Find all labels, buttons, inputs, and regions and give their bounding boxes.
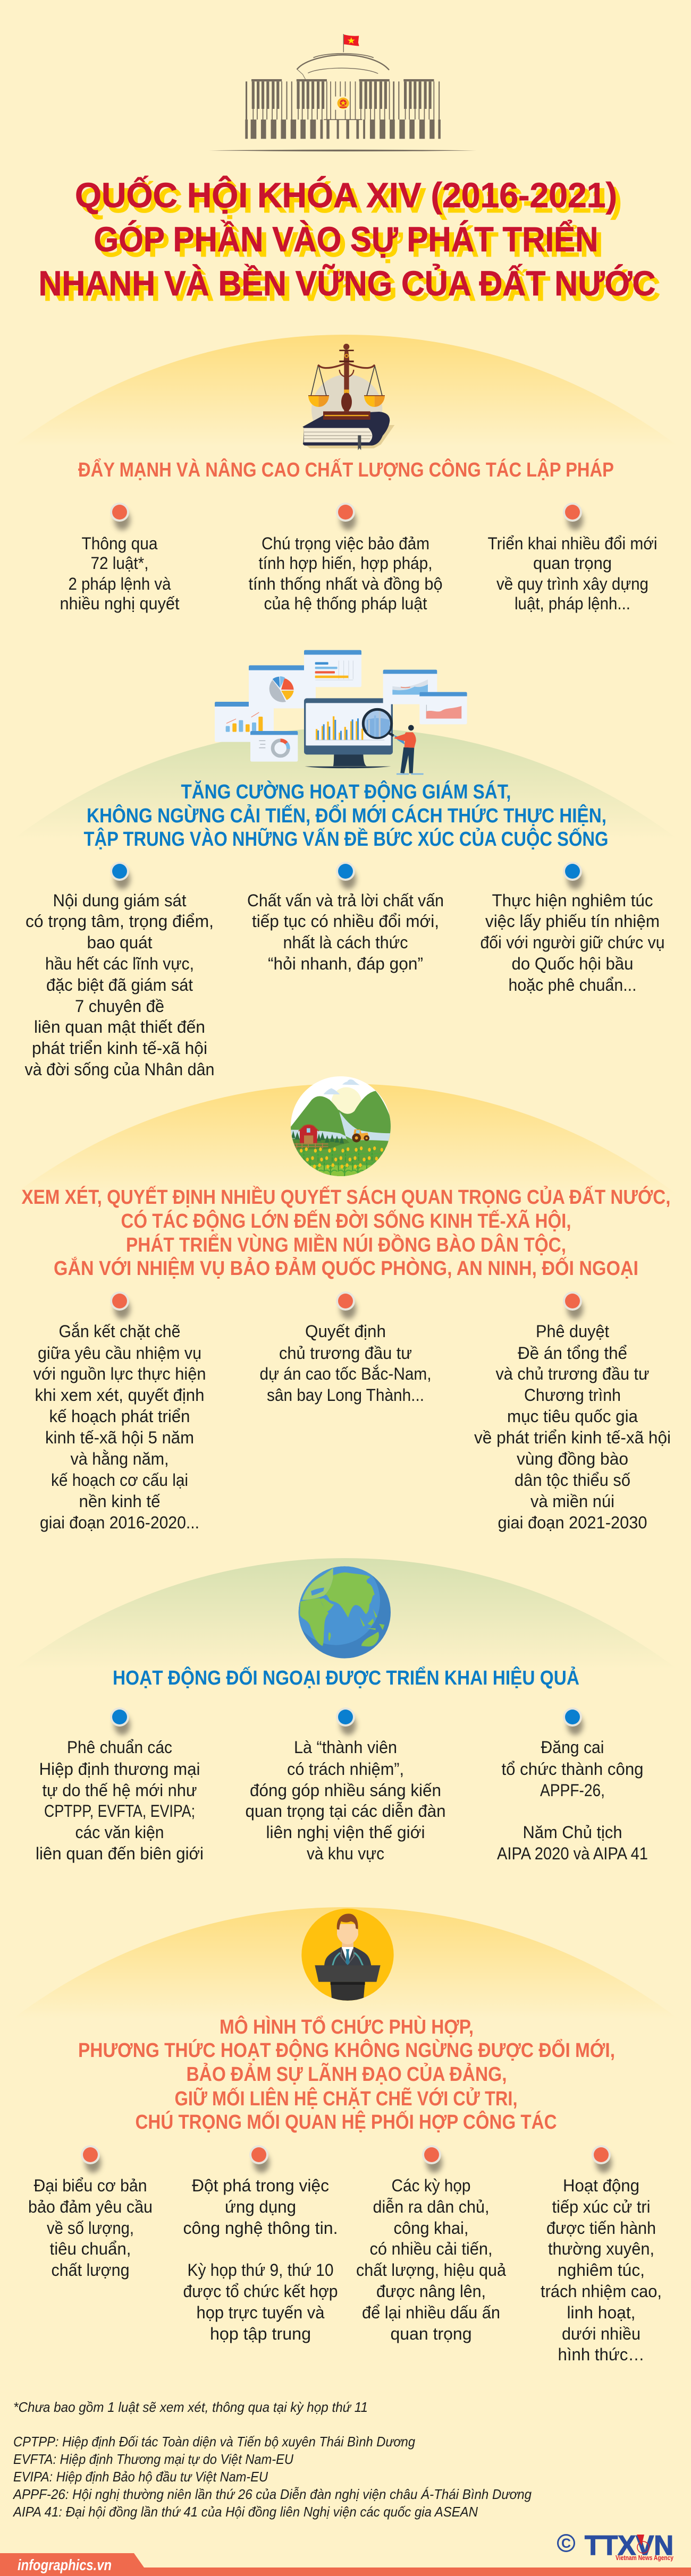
point 2: họp trực tuyến và: [197, 2303, 325, 2322]
point 4: thường xuyên,: [548, 2239, 654, 2258]
icon: globe: [299, 1566, 391, 1659]
logo: TTXVN: C: [561, 2536, 571, 2551]
point 2: nhất là cách thức: [283, 933, 408, 952]
logo: TTXVN: TTXVN: [585, 2530, 673, 2561]
icon: national emblem: [338, 98, 349, 109]
panel: oversight: [13, 650, 678, 1079]
point 2: của hệ thống pháp luật: [264, 594, 427, 613]
panel: organisation model: [13, 1907, 678, 2364]
point 1: nhiều nghị quyết: [60, 594, 180, 613]
heading: [21, 1185, 671, 1280]
heading: PHÁT TRIỂN VÙNG MIỀN NÚI ĐỒNG BÀO DÂN TỘC,: [126, 1232, 566, 1256]
heading: PHƯƠNG THỨC HOẠT ĐỘNG KHÔNG NGỪNG ĐƯỢC ĐỔI MỚI,: [78, 2038, 615, 2062]
point 4: hình thức…: [558, 2345, 644, 2364]
point 2: liên nghị viện thế giới: [266, 1823, 425, 1842]
chart window: bar chart: [215, 702, 274, 742]
point 3: [488, 503, 657, 613]
point 1: CPTPP, EVFTA, EVIPA;: [44, 1801, 195, 1821]
point 3: luật, pháp lệnh...: [515, 594, 630, 613]
title: NHANH VÀ BỀN VỮNG CỦA ĐẤT NƯỚC: [38, 263, 656, 303]
point 2: “hỏi nhanh, đáp gọn”: [268, 954, 423, 973]
icon: dome: [297, 54, 389, 79]
point 1: khi xem xét, quyết định: [35, 1385, 204, 1405]
point 2: tính thống nhất và đồng bộ: [249, 574, 442, 593]
heading: BẢO ĐẢM SỰ LÃNH ĐẠO CỦA ĐẢNG,: [186, 2062, 507, 2086]
title: QUỐC HỘI KHÓA XIV (2016-2021): [75, 175, 617, 215]
point 2: được tổ chức kết hợp: [183, 2282, 338, 2301]
point 3: APPF-26,: [540, 1781, 605, 1800]
corn field: [299, 1146, 386, 1176]
point 3: Đề án tổng thể: [518, 1344, 627, 1363]
heading: KHÔNG NGỪNG CẢI TIẾN, ĐỔI MỚI CÁCH THỨC THỰC HIỆN,: [87, 803, 606, 827]
point 2: tính hợp hiến, hợp pháp,: [258, 554, 433, 573]
heading: CHÚ TRỌNG MỐI QUAN HỆ PHỐI HỢP CÔNG TÁC: [135, 2110, 557, 2133]
footnote: *Chưa bao gồm 1 luật sẽ xem xét, thông qua tại kỳ họp thứ 11: [13, 2399, 368, 2415]
point 1: Nội dung giám sát: [53, 891, 187, 910]
point 3: Năm Chủ tịch: [523, 1823, 622, 1842]
point 1: nền kinh tế: [79, 1492, 161, 1511]
point 3: do Quốc hội bầu: [511, 954, 634, 973]
point 3: [356, 2145, 506, 2343]
point 3: AIPA 2020 và AIPA 41: [497, 1844, 648, 1863]
point 4: [541, 2145, 662, 2364]
point 2: [246, 1707, 445, 1863]
point 1: kinh tế-xã hội 5 năm: [45, 1428, 194, 1447]
point 4: dưới nhiều: [562, 2324, 641, 2343]
point 1: 72 luật*,: [90, 554, 149, 573]
point 3: và chủ trương đầu tư: [495, 1364, 650, 1383]
point 1: kế hoạch phát triển: [49, 1407, 190, 1426]
glossary: EVFTA: Hiệp định Thương mại tự do Việt Nam-EU: [13, 2451, 293, 2467]
point 3: vùng đồng bào: [517, 1449, 628, 1468]
logo: TTXVN: Vietnam News Agency: [616, 2554, 674, 2562]
point 1: tự do thế hệ mới như: [43, 1781, 197, 1800]
point 1: Thông qua: [82, 534, 158, 553]
point 1: về số lượng,: [47, 2218, 134, 2238]
point 3: và miền núi: [530, 1492, 614, 1511]
point 1: và hằng năm,: [70, 1449, 169, 1468]
point 3: Chương trình: [524, 1385, 621, 1405]
point 2: Là “thành viên: [294, 1738, 397, 1757]
point 4: được tiến hành: [546, 2218, 656, 2238]
point 3: quan trọng: [390, 2324, 472, 2343]
background arc: [13, 1907, 678, 2019]
point 3: Triển khai nhiều đổi mới: [488, 534, 657, 553]
point 3: Đăng cai: [541, 1738, 604, 1757]
footer bar: infographics.vn: [18, 2557, 112, 2574]
point 1: Gắn kết chặt chẽ: [58, 1322, 181, 1341]
point 3: được nâng lên,: [376, 2282, 486, 2301]
point 2: Quyết định: [305, 1322, 386, 1341]
glossary: APPF-26: Hội nghị thường niên lần thứ 26 của Diễn đàn nghị viện châu Á-Thái Bình Dương: [12, 2486, 532, 2502]
point 1: [36, 1707, 204, 1863]
point 1: với nguồn lực thực hiện: [33, 1364, 206, 1383]
heading: MÔ HÌNH TỔ CHỨC PHÙ HỢP,: [220, 2014, 474, 2038]
point 3: tổ chức thành công: [502, 1759, 643, 1779]
figure: analyst: [393, 725, 424, 775]
point 3: [474, 1291, 671, 1532]
icon: magnifying glass: [363, 709, 394, 738]
chart window: horizontal bars: [304, 650, 361, 687]
icon: flag: [343, 34, 359, 52]
chart window: area chart red: [419, 692, 467, 724]
point 2: Chú trọng việc bảo đảm: [262, 534, 429, 553]
heading: ĐẨY MẠNH VÀ NÂNG CAO CHẤT LƯỢNG CÔNG TÁC LẬP PHÁP: [78, 457, 614, 481]
point 2: họp tập trung: [210, 2324, 311, 2343]
point 2: công nghệ thông tin.: [183, 2218, 338, 2238]
point 3: về quy trình xây dựng: [496, 574, 648, 593]
point 2: dự án cao tốc Bắc-Nam,: [259, 1364, 432, 1383]
point 1: Hiệp định thương mại: [39, 1759, 200, 1779]
point 4: nghiêm túc,: [558, 2260, 645, 2280]
point 2: ứng dụng: [225, 2197, 296, 2216]
point 3: để lại nhiều dấu ấn: [362, 2303, 500, 2322]
panel: major decisions: [13, 1076, 678, 1532]
point 2: tiếp tục có nhiều đổi mới,: [252, 912, 439, 931]
point 3: chất lượng, hiệu quả: [356, 2260, 506, 2280]
point 3: dân tộc thiểu số: [515, 1470, 630, 1490]
point 3: Phê duyệt: [536, 1322, 609, 1341]
heading: GẮN VỚI NHIỆM VỤ BẢO ĐẢM QUỐC PHÒNG, AN NINH, ĐỐI NGOẠI: [54, 1256, 638, 1280]
point 2: Kỳ họp thứ 9, thứ 10: [187, 2260, 334, 2280]
point 3: đối với người giữ chức vụ: [481, 933, 664, 952]
point 2: chủ trương đầu tư: [279, 1344, 412, 1363]
background arc: [13, 728, 678, 839]
title: GÓP PHẦN VÀO SỰ PHÁT TRIỂN: [94, 219, 599, 259]
footer bar: [0, 2553, 691, 2576]
point 3: hoặc phê chuẩn...: [508, 975, 637, 994]
point 2: Chất vấn và trả lời chất vấn: [247, 891, 444, 910]
icon: monitor: [304, 698, 393, 768]
background arc: [13, 335, 678, 446]
icon: barn: [294, 1125, 328, 1149]
icon: farm landscape: [287, 1076, 393, 1179]
point 3: Thực hiện nghiêm túc: [492, 891, 653, 910]
glossary: EVIPA: Hiệp định Bảo hộ đầu tư Việt Nam-EU: [13, 2469, 268, 2485]
point 2: quan trọng tại các diễn đàn: [246, 1801, 445, 1821]
chart window: donut chart: [250, 731, 298, 762]
point 3: có nhiều cải tiến,: [370, 2239, 492, 2258]
point 1: giữa yêu cầu nhiệm vụ: [38, 1344, 201, 1363]
panel: legislation: [13, 335, 678, 613]
point 1: hầu hết các lĩnh vực,: [45, 954, 194, 973]
chart window: area chart blue: [383, 670, 437, 704]
point 3: diễn ra dân chủ,: [373, 2197, 489, 2216]
heading: GIỮ MỐI LIÊN HỆ CHẶT CHẼ VỚI CỬ TRI,: [174, 2086, 518, 2110]
point 4: trách nhiệm cao,: [541, 2282, 662, 2301]
point 2: sân bay Long Thành...: [267, 1385, 424, 1405]
point 1: và đời sống của Nhân dân: [24, 1060, 215, 1079]
heading: HOẠT ĐỘNG ĐỐI NGOẠI ĐƯỢC TRIỂN KHAI HIỆU QUẢ: [113, 1665, 579, 1689]
point 1: đặc biệt đã giám sát: [46, 975, 193, 994]
point 1: 7 chuyên đề: [75, 997, 164, 1016]
point 2: Đột phá trong việc: [192, 2176, 329, 2195]
point 3: [497, 1707, 648, 1863]
point 1: [33, 1291, 206, 1532]
point 1: Đại biểu cơ bản: [34, 2176, 147, 2195]
heading: TẬP TRUNG VÀO NHỮNG VẤN ĐỀ BỨC XÚC CỦA CUỘC SỐNG: [84, 827, 608, 851]
point 1: liên quan đến biên giới: [36, 1844, 204, 1863]
background arc: [13, 1084, 678, 1195]
point 1: 2 pháp lệnh và: [68, 574, 171, 593]
point 3: giai đoạn 2021-2030: [498, 1513, 647, 1532]
point 1: giai đoạn 2016-2020...: [40, 1513, 199, 1532]
point 1: các văn kiện: [75, 1823, 164, 1842]
point 2: [183, 2145, 338, 2343]
point 4: linh hoạt,: [567, 2303, 636, 2322]
point 1: [60, 503, 180, 613]
point 1: Phê chuẩn các: [67, 1738, 172, 1757]
icon: scales of justice on a book: [302, 344, 394, 450]
point 2: và khu vực: [307, 1844, 384, 1863]
point 3: việc lấy phiếu tín nhiệm: [485, 912, 660, 931]
heading: CÓ TÁC ĐỘNG LỚN ĐẾN ĐỜI SỐNG KINH TẾ-XÃ HỘI,: [121, 1209, 571, 1232]
point 1: [28, 2145, 153, 2280]
icon: tractor: [352, 1129, 369, 1142]
point 3: mục tiêu quốc gia: [507, 1407, 638, 1426]
background arc: [13, 1558, 678, 1670]
point 2: đóng góp nhiều sáng kiến: [250, 1781, 441, 1800]
title: [38, 175, 656, 303]
point 3: [481, 862, 664, 994]
glossary: AIPA 41: Đại hội đồng lần thứ 41 của Hội đồng liên Nghị viện các quốc gia ASEAN: [12, 2504, 478, 2520]
point 2: có trách nhiệm”,: [287, 1759, 404, 1779]
point 1: bảo đảm yêu cầu: [28, 2197, 153, 2216]
heading: [78, 2014, 615, 2133]
glossary: CPTPP: Hiệp định Đối tác Toàn diện và Tiến bộ xuyên Thái Bình Dương: [13, 2434, 415, 2450]
icon: National Assembly building: [209, 34, 477, 151]
point 4: Hoạt động: [563, 2176, 639, 2195]
point 3: quan trọng: [533, 554, 612, 573]
point 1: [24, 862, 215, 1079]
panel: foreign relations: [13, 1557, 678, 1863]
point 3: Các kỳ họp: [391, 2176, 471, 2195]
glossary: [12, 2434, 532, 2520]
point 1: có trọng tâm, trọng điểm,: [26, 912, 214, 931]
building colonnade: [209, 79, 477, 151]
point 2: [249, 503, 442, 613]
point 2: [247, 862, 444, 973]
point 3: công khai,: [393, 2218, 469, 2238]
point 4: tiếp xúc cử tri: [552, 2197, 651, 2216]
heading: TĂNG CƯỜNG HOẠT ĐỘNG GIÁM SÁT,: [181, 779, 511, 803]
point 1: tiêu chuẩn,: [50, 2239, 131, 2258]
point 2: [259, 1291, 432, 1405]
chart window: pie chart: [249, 665, 316, 708]
point 1: bao quát: [87, 933, 153, 952]
point 3: về phát triển kinh tế-xã hội: [474, 1428, 671, 1447]
illustration: dashboards and analyst: [215, 650, 467, 775]
point 1: chất lượng: [51, 2260, 130, 2280]
point 1: phát triển kinh tế-xã hội: [32, 1039, 207, 1058]
icon: speaker at podium: [301, 1909, 394, 2001]
point 1: liên quan mật thiết đến: [34, 1017, 205, 1036]
heading: [84, 779, 608, 851]
point 1: kế hoạch cơ cấu lại: [51, 1470, 188, 1490]
